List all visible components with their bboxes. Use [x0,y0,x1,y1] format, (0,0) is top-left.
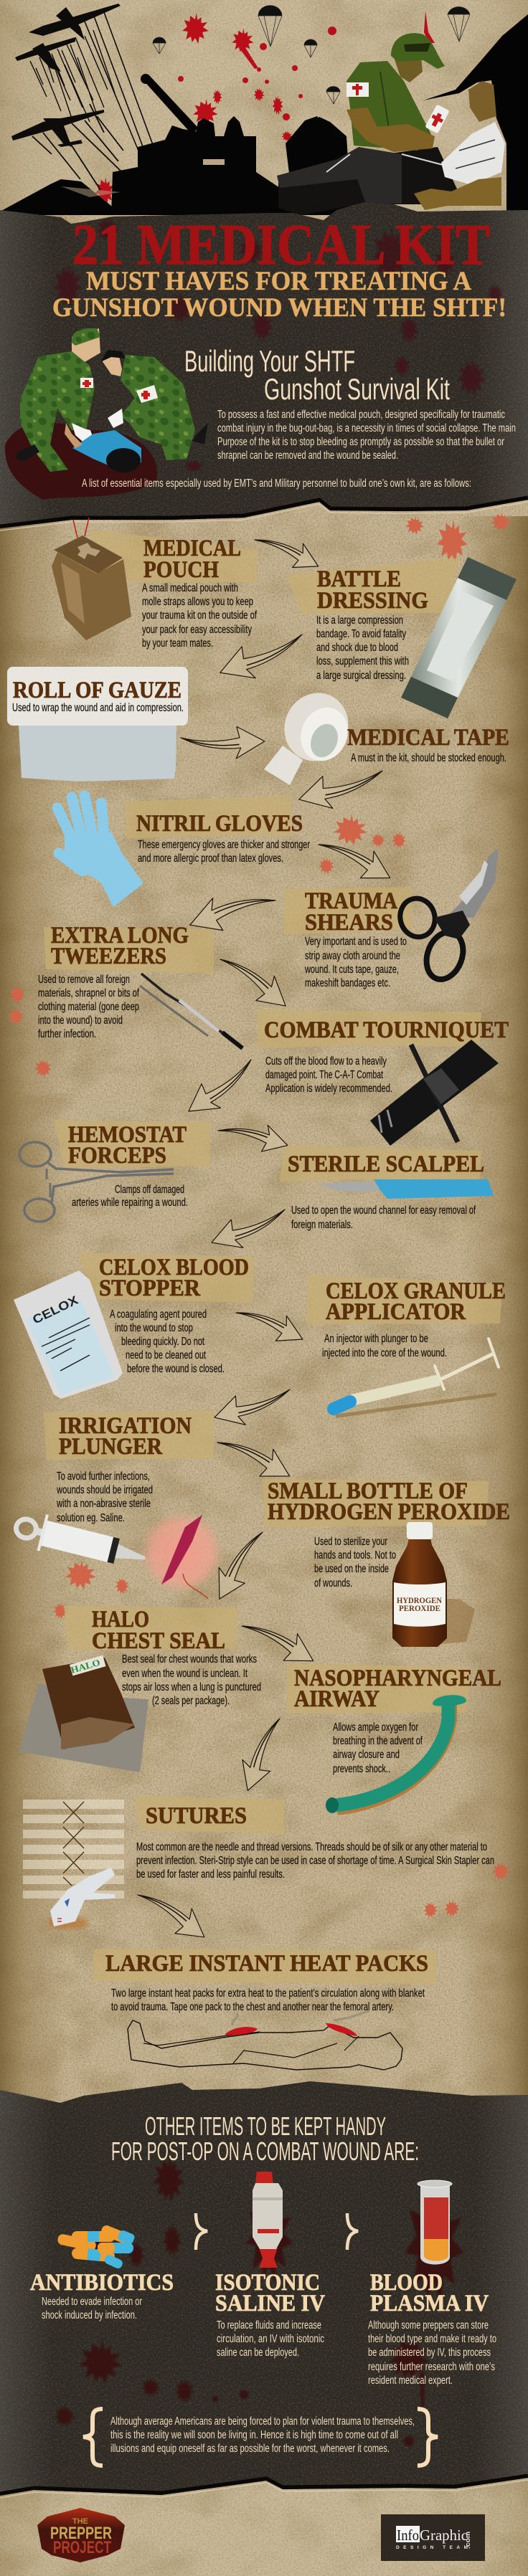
icon: gauze roll [7,667,188,726]
flow arrows [131,526,397,1948]
tag [280,1145,481,1183]
logo: infographic design team: Info [397,2527,419,2544]
description: with a non-abrasive sterile [56,1498,151,1510]
panel: halo chest seal [19,1606,261,1772]
heading: IRRIGATION [59,1413,192,1439]
panel: celox granule applicator [306,1275,506,1416]
icon: bottle [392,1522,475,1647]
tag [263,1479,489,1527]
subtitle: GUNSHOT WOUND WHEN THE SHTF! [52,293,506,323]
description [217,2319,324,2359]
left brace [83,2409,103,2466]
description: Best seal for chest wounds that works [122,1653,257,1665]
panel: nitril gloves [57,796,310,907]
description: wounds should be irrigated [56,1484,153,1496]
logo: the prepper project: PROJECT [53,2538,111,2557]
panel: celox blood stopper [14,1253,254,1399]
description: Needed to evade infection or [42,2296,142,2308]
description: foreign materials. [291,1219,353,1231]
heading [294,1665,501,1712]
panel: medical pouch [52,518,258,650]
panel: hemostat forceps [19,1121,210,1222]
tag [93,1949,436,1984]
panel: battle dressing [286,557,517,718]
description [265,1055,392,1095]
panel: combat tourniquet [258,1009,509,1146]
description: These emergency gloves are thicker and stronger [138,839,310,851]
wounded patient and cliff [414,14,528,212]
logo: the prepper project [37,2508,125,2562]
icon: bottle: PEROXIDE [399,1603,440,1613]
description: saline can be deployed. [217,2347,299,2359]
panel: large instant heat packs [93,1949,436,2070]
heading: TRAUMA [305,888,397,914]
heading: COMBAT TOURNIQUET [264,1017,509,1043]
heading: MEDICAL TAPE [347,725,509,751]
tag [284,887,412,935]
tag [77,1253,254,1303]
quote text: Although average Americans are being forced to plan for violent trauma to themselves, [110,2415,415,2428]
heading: CELOX GRANULE [326,1278,506,1304]
heading: NASOPHARYNGEAL [294,1665,501,1691]
description [142,582,257,650]
description: a large surgical dressing. [316,670,406,682]
blood splatter [95,11,435,205]
suture strips [23,1800,124,1898]
heading: SMALL BOTTLE OF [268,1478,468,1504]
dark header band [0,201,528,531]
description: into the wound) to avoid [38,1014,123,1027]
heading: POUCH [143,557,219,583]
description [322,1333,447,1359]
heading: NITRIL GLOVES [136,811,303,837]
description: Clamps off damaged [115,1184,184,1196]
icon: gauze sheet [19,726,176,781]
heading: CELOX BLOOD [99,1255,249,1280]
intro paragraph: shrapnel can be removed and the wound be sealed. [217,450,398,462]
description [38,974,139,1040]
description: Very important and is used to [305,936,407,948]
heading: LARGE INSTANT HEAT PACKS [105,1951,428,1977]
quote text [110,2415,415,2455]
description: solution eg. Saline. [57,1512,125,1524]
icon: pouch [52,518,131,640]
icon: seal package [19,1655,148,1772]
tag [286,558,459,614]
description: shock induced by infection. [42,2309,137,2321]
description: your trauma kit on the outside of [142,609,257,622]
icon: seal package: HALO [70,1657,101,1676]
panel: sutures [23,1796,494,1929]
icon: iv bag [253,2172,283,2268]
logo: infographic design team: DESIGN TEAM [396,2545,468,2550]
description: be used for faster and less painful results. [136,1868,285,1881]
heading: DRESSING [317,588,428,614]
description: Used to wrap the wound and aid in compression. [12,702,184,714]
heading [215,2270,325,2316]
description: materials, shrapnel or bits of [38,987,139,999]
icon: celox packet [14,1270,123,1399]
description: stops air loss when a lung is punctured [122,1681,261,1693]
icon: airway tube [326,1695,466,1813]
description: before the wound is closed. [127,1363,225,1375]
description [316,614,409,682]
description: airway closure and [333,1749,400,1761]
icon: bottle: HYDROGEN [397,1595,442,1605]
icon: syringe [12,1508,150,1577]
icon: celox packet: CELOX [30,1293,81,1327]
heading [326,1278,506,1325]
heading: PLUNGER [59,1434,163,1460]
description: and more allergic proof than latex gloves. [138,852,283,865]
description: hands and tools. Not to [314,1549,396,1562]
heading: STERILE SCALPEL [288,1151,484,1177]
hero illustration: war scene [0,4,528,215]
heading: ISOTONIC [215,2270,320,2296]
logo: infographic design team: Graphic [420,2527,468,2544]
tag [44,927,214,974]
icon: capsules [57,2224,136,2270]
heading: STOPPER [99,1275,201,1301]
heading: AIRWAY [294,1686,380,1712]
panel: isotonic saline [215,2172,325,2359]
description: by your team mates. [142,637,213,650]
heading [268,1478,510,1525]
heading: SHEARS [305,910,393,936]
heading [68,1122,187,1169]
subtitle [52,267,506,323]
heading [99,1255,249,1301]
logo: infographic design team [381,2514,485,2561]
description [122,1653,261,1707]
heading: EXTRA LONG [51,923,189,949]
patient [72,430,141,470]
description [136,1841,494,1881]
panel: medical tape [264,683,509,785]
description: resident medical expert. [368,2375,453,2387]
description [72,1184,188,1209]
illustration: two medics treating patient [5,328,208,500]
description: prevents shock.. [333,1763,390,1775]
main title: 21 MEDICAL KIT [72,214,490,277]
panel: nasopharyngeal airway [287,1663,501,1813]
description: molle straps allows you to keep [142,596,253,608]
description: be used on the inside [314,1563,389,1575]
description [138,839,310,865]
panel: trauma shears [284,848,499,989]
tag [134,1796,284,1834]
icon: scalpel [319,1179,494,1199]
description [314,1536,396,1589]
decorative blood on paper [9,513,511,1919]
tag [306,1275,502,1324]
dark footer band [0,2079,528,2502]
stitches [63,1802,84,1886]
icon: brace one [196,2213,207,2250]
heading: ROLL OF GAUZE [13,678,182,703]
description: Allows ample oxygen for [333,1721,418,1734]
description [368,2319,496,2387]
parachutes [153,6,470,104]
panel: extra long tweezers [38,923,242,1048]
description [111,1987,425,2013]
description: into the wound to stop [115,1322,193,1334]
heading: APPLICATOR [326,1299,466,1325]
heading [317,566,428,614]
quote text: illusions and equip oneself as far as possible for the worst, whenever it comes. [110,2443,390,2455]
description: wound. It cuts tape, gauze, [304,964,399,976]
intro paragraph [217,409,516,462]
description: Cuts off the blood flow to a heavily [265,1055,387,1068]
description: to avoid trauma. Tape one pack to the chest and another near the femoral artery. [111,2001,394,2013]
description [110,1308,225,1375]
tank and ground silhouette [0,74,352,215]
description: makeshift bandages etc. [305,977,390,989]
title [52,214,506,323]
icon: shears [396,848,499,984]
panel: irrigation plunger [12,1410,223,1599]
description: bleeding quickly. Do not [121,1336,204,1348]
description: your pack for easy accessibility [142,624,252,636]
icon: tourniquet [370,1040,499,1146]
panel: sterile scalpel [280,1145,494,1231]
description: of wounds. [314,1577,352,1589]
logo: infographic design team: .com [464,2532,471,2549]
description: To replace fluids and increase [217,2319,321,2332]
description: loss, supplement this with [316,655,409,667]
medic soldier with armband [277,33,459,215]
heading: BLOOD [370,2270,443,2296]
heading: SUTURES [146,1803,247,1829]
description [56,1470,153,1524]
description: injected into the core of the wound. [322,1347,447,1359]
description [42,2296,142,2321]
tag [125,796,293,839]
tag [64,1606,238,1650]
bomber planes and bomb streaks [11,4,155,190]
heading: MEDICAL [143,536,241,561]
heading: ANTIBIOTICS [30,2270,174,2296]
description: further infection. [38,1028,96,1040]
description: damaged point. The C-A-T Combat [265,1069,383,1081]
description [333,1721,423,1775]
icon: skin stapler [48,1868,115,1929]
icon: glove [57,796,143,907]
heading [143,536,241,583]
description: To avoid further infections, [57,1470,150,1483]
description [291,1204,476,1231]
description: Used to remove all foreign [38,974,130,986]
icon: forceps [19,1142,174,1222]
heading: HEMOSTAT [68,1122,187,1148]
icon: test tube [418,2180,452,2264]
description: A small medical pouch with [142,582,238,594]
description: An injector with plunger to be [324,1333,428,1345]
description: need to be cleaned out [126,1349,206,1361]
icon: applicator [334,1339,499,1416]
icon: body outline with heat packs [128,2011,402,2070]
description: Application is widely recommended. [265,1083,392,1095]
tag [54,1121,210,1169]
tag [258,1009,481,1048]
heading: CHEST SEAL [92,1628,225,1654]
heading: building your kit [184,344,450,406]
description: A coagulating agent poured [110,1308,207,1321]
heading: HALO [92,1607,149,1632]
description: (2 seals per package). [152,1695,230,1707]
description: even when the wound is unclean. It [122,1668,248,1680]
description: It is a large compression [316,614,403,627]
heading: BATTLE [317,566,401,592]
description: bandage. To avoid fatality [316,628,406,640]
panel: blood plasma [368,2180,496,2387]
icon: wound [140,1511,223,1599]
tag [44,1410,214,1460]
icon: brace two [347,2213,358,2250]
description: circulation, an IV with isotonic [217,2333,324,2345]
panel: roll of gauze [7,667,188,781]
description: and shock due to blood [316,642,398,654]
description [304,936,407,989]
heading [305,888,397,936]
heading [92,1607,225,1654]
heading: FORCEPS [68,1143,166,1169]
right brace [418,2409,438,2466]
description: breathing in the advent of [333,1735,423,1747]
heading: building your kit: Building Your SHTF [184,344,355,378]
description: clothing material (gone deep [38,1001,139,1013]
quote text: this is the reality we will soon be living in. Hence it is high time to come out of all [110,2429,398,2441]
tag [90,529,258,582]
icon: tape roll [264,683,359,785]
heading [51,923,189,969]
panel: antibiotics [30,2224,174,2321]
logo: the prepper project: THE [72,2517,88,2526]
heading [59,1413,192,1460]
second medic [102,351,122,376]
heading: TWEEZERS [51,944,166,969]
heading: SALINE IV [215,2291,325,2316]
subtitle: MUST HAVES FOR TREATING A [86,267,471,296]
description: strip away cloth around the [305,950,400,962]
heading: PLASMA IV [370,2291,489,2316]
description: Used to sterilize your [314,1536,387,1548]
logo: the prepper project: PREPPER [50,2524,112,2543]
closing quote [83,2409,438,2466]
description: arteries while repairing a wound. [72,1197,188,1209]
heading: other items [111,2111,419,2166]
heading [370,2270,489,2316]
icon: tweezers [140,974,242,1048]
panel: hydrogen peroxide bottle [263,1478,510,1647]
tag [287,1663,471,1714]
icon: dressing [401,557,517,718]
